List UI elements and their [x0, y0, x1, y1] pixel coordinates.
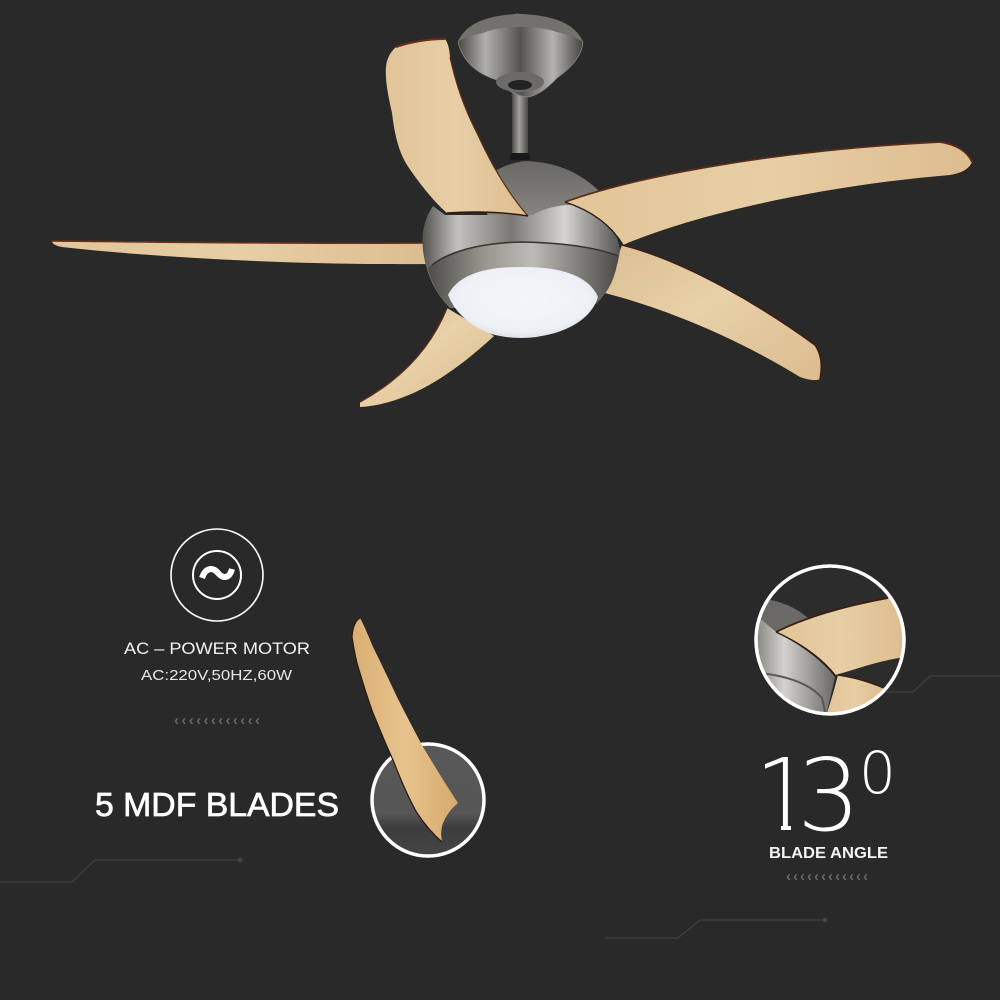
inset groove [766, 672, 826, 712]
hub body [422, 205, 620, 308]
ceiling fan [52, 14, 972, 407]
heading: 5 MDF blades: 5 MDF BLADES [95, 786, 339, 823]
inset upper blade [776, 598, 906, 675]
lamp glass [448, 267, 598, 338]
number: 13 degrees: 3 [797, 737, 861, 854]
hub dome [480, 161, 600, 225]
chevron divider: left: ‹‹‹‹‹‹‹‹‹‹‹‹ [174, 712, 260, 729]
circuit line: right [885, 676, 1000, 692]
fan blade: right [565, 142, 972, 245]
AC motor icon [171, 529, 263, 621]
inset hub [758, 619, 835, 712]
hub lower ring [428, 242, 618, 308]
number: 13 degrees [765, 750, 891, 832]
label: blade angle: BLADE ANGLE [769, 845, 888, 862]
chevron divider: right: ‹‹‹‹‹‹‹‹‹‹‹‹ [786, 868, 868, 885]
fan blade: lower left [360, 308, 494, 407]
circuit line: bottom centre [605, 918, 827, 938]
heading: AC power motor: AC – POWER MOTOR [124, 639, 310, 658]
inset dome [761, 600, 808, 632]
fan blade: upper left [386, 39, 528, 216]
inset lower blade [827, 675, 884, 712]
number: 13 degrees: 0 [859, 739, 896, 807]
blade angle inset [750, 566, 906, 716]
fan blade: lower right [605, 245, 821, 380]
text: motor specification: AC:220V,50HZ,60W [141, 668, 292, 684]
ceiling canopy [458, 14, 583, 97]
circuit line: bottom left [0, 858, 242, 882]
single MDF blade [352, 618, 458, 842]
number: 13 degrees: 1 [752, 737, 816, 854]
single blade disc [372, 744, 484, 856]
hub groove [432, 242, 618, 265]
stem [510, 85, 530, 160]
fan blade: far left [52, 241, 430, 264]
